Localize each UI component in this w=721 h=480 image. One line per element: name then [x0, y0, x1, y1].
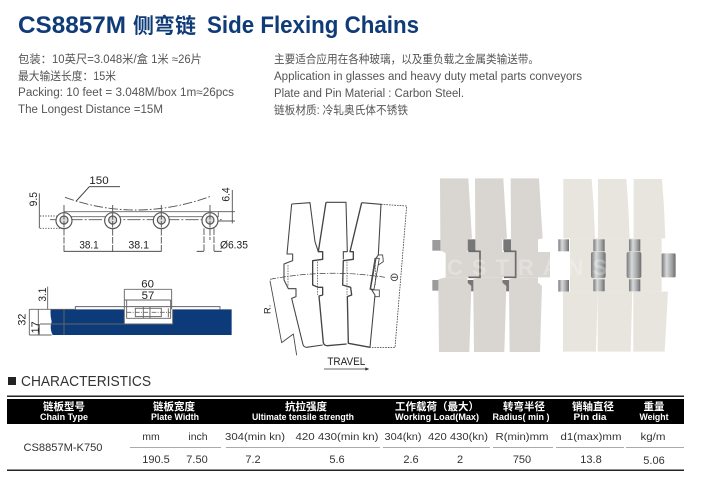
text block: packing information	[18, 52, 234, 116]
chain plate outline drawing with travel direction: TRAVEL	[327, 356, 365, 368]
side view dimension drawing: 38.1	[79, 240, 99, 252]
photo watermark: CSTRANS	[447, 255, 607, 280]
table unit row: R(min)mm	[496, 431, 549, 443]
text block: packing information: 包装：10英尺=3.048米/盒 1米 ≈26片	[18, 52, 202, 66]
text block: packing information: The Longest Distance =15M	[18, 104, 163, 116]
table header labels	[40, 400, 668, 422]
table values row: 2.6	[403, 454, 419, 466]
text block: application and material: Application in glasses and heavy duty metal parts conveyors	[274, 71, 582, 83]
side view dimension drawing: 6.4	[221, 187, 233, 202]
table header labels: 链板宽度	[153, 400, 195, 413]
table values row: 7.2	[245, 454, 261, 466]
title	[18, 12, 419, 39]
top view with blue plate: 57	[142, 290, 154, 302]
text block: application and material: 链板材质: 冷轧奥氏体不锈铁	[274, 103, 408, 117]
table values row: 13.8	[580, 454, 602, 466]
table unit row: inch	[188, 431, 208, 443]
table header labels: 销轴直径	[572, 400, 614, 413]
text block: application and material: Plate and Pin Material : Carbon Steel.	[274, 88, 464, 100]
table header band	[7, 399, 684, 424]
side view dimension drawing: 9.5	[28, 192, 40, 206]
side view dimension drawing	[28, 175, 248, 252]
table unit row: 304(kn)	[384, 431, 422, 443]
table values row	[142, 454, 665, 467]
chain plate outline drawing with travel direction: R.	[263, 305, 273, 314]
table unit row: 304(min kn)	[225, 431, 285, 443]
section heading: characteristics: CHARACTERISTICS	[21, 373, 151, 390]
text block: packing information: 最大输送长度：15米	[18, 69, 116, 83]
table header labels: Plate Width	[151, 412, 199, 422]
photo: chain underside	[432, 178, 550, 352]
text block: application and material	[274, 52, 582, 117]
table header labels: Pin dia	[574, 412, 608, 422]
table header labels: Chain Type	[40, 412, 88, 422]
top view with blue plate	[16, 278, 232, 335]
table header labels: Working Load(Max)	[395, 412, 479, 422]
top view with blue plate: 32	[16, 314, 28, 326]
table unit row	[142, 431, 666, 443]
table unit row: 420 430(kn)	[428, 431, 488, 443]
table unit row: d1(max)mm	[560, 431, 622, 443]
chain type value: CS8857M-K750	[24, 442, 102, 454]
specification table	[7, 396, 684, 471]
side view dimension drawing: 38.1	[128, 240, 149, 252]
table unit row: mm	[142, 431, 160, 443]
table header labels: 链板型号	[43, 400, 85, 413]
chain plate outline drawing with travel direction	[263, 202, 407, 371]
table header labels: 重量	[644, 400, 665, 413]
table header labels: 工作载荷（最大）	[395, 400, 479, 413]
table header labels: Radius( min )	[492, 412, 550, 422]
text block: packing information: Packing: 10 feet = 3.048M/box 1m≈26pcs	[18, 87, 234, 99]
table values row: 5.6	[329, 454, 345, 466]
top view with blue plate: 3.1	[37, 288, 49, 302]
table values row: 190.5	[142, 454, 170, 466]
top view with blue plate: 60	[141, 278, 154, 290]
top view with blue plate: 17	[30, 321, 42, 333]
title: 侧弯链	[133, 14, 196, 38]
table values row: 750	[513, 454, 531, 466]
table header labels: 转弯半径	[503, 400, 545, 413]
title: CS8857M	[18, 12, 126, 39]
title: Side Flexing Chains	[207, 12, 419, 39]
text block: application and material: 主要适合应用在各种玻璃，以及重负载之金属类输送带。	[274, 52, 539, 66]
table unit row: kg/m	[640, 431, 666, 443]
table header labels: 抗拉强度	[285, 400, 327, 413]
side view dimension drawing: 150	[89, 175, 109, 187]
table values row: 2	[457, 454, 463, 466]
table header labels: Ultimate tensile strength	[252, 412, 354, 422]
table values row: 7.50	[186, 454, 208, 466]
table unit row: 420 430(min kn)	[296, 431, 378, 443]
side view dimension drawing: Ø6.35	[220, 240, 248, 252]
table row separators	[130, 447, 684, 448]
table values row: 5.06	[643, 455, 665, 467]
table header labels: Weight	[640, 412, 668, 422]
photo: chain top side with hinges	[558, 179, 676, 352]
